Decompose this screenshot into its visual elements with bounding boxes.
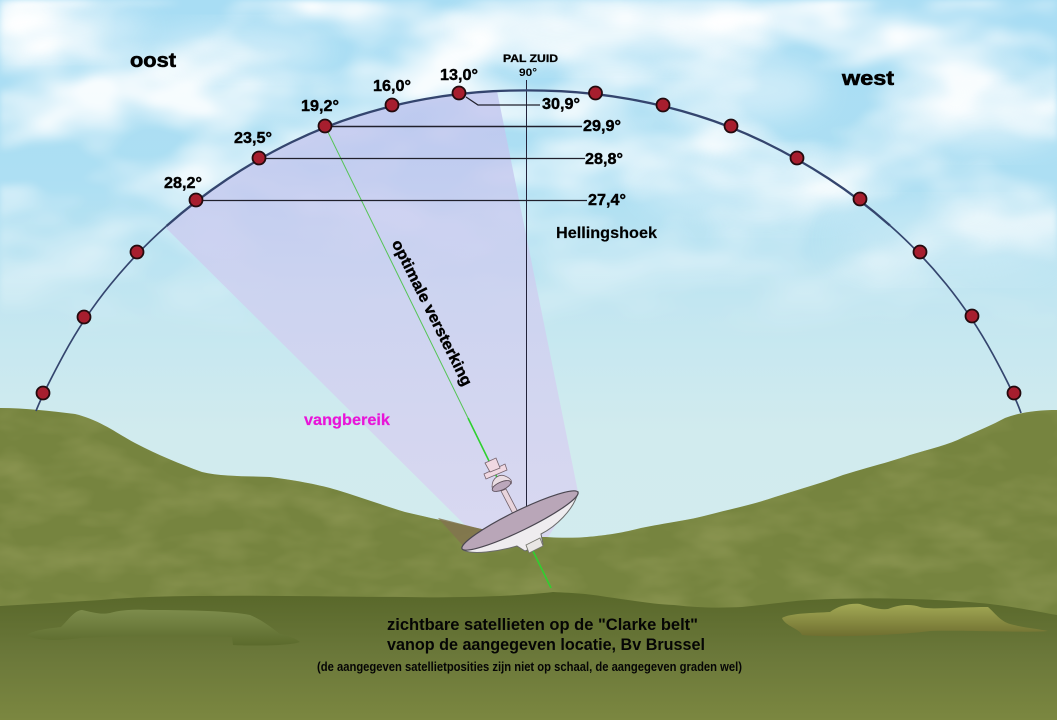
right ground patch bbox=[782, 604, 1048, 636]
azimuth labels: 19,2° bbox=[301, 98, 339, 115]
elevation labels bbox=[542, 96, 626, 209]
caption: vanop de aangegeven locatie, Bv Brussel bbox=[387, 635, 705, 654]
hills bbox=[0, 408, 1057, 615]
east label: oost bbox=[130, 50, 176, 72]
azimuth labels: 16,0° bbox=[373, 78, 411, 95]
azimuth labels bbox=[164, 67, 478, 192]
azimuth labels: 28,2° bbox=[164, 175, 202, 192]
dish bowl bbox=[462, 492, 578, 552]
brown beam shadow on hill bbox=[438, 518, 485, 548]
sky background bbox=[0, 0, 1057, 380]
elevation labels: 30,9° bbox=[542, 96, 580, 113]
icon: satellite dish bbox=[458, 458, 582, 558]
west label: west bbox=[841, 68, 894, 90]
capture range beam (vangbereik) bbox=[166, 91, 578, 540]
azimuth labels: 13,0° bbox=[440, 67, 478, 84]
dish stub bbox=[526, 538, 543, 553]
caption: (de aangegeven satellietposities zijn niet op schaal, de aangegeven graden wel) bbox=[317, 660, 742, 674]
azimuth labels: 23,5° bbox=[234, 130, 272, 147]
due south label: PAL ZUID bbox=[503, 53, 558, 65]
capture range label: vangbereik bbox=[304, 412, 390, 429]
caption bbox=[317, 615, 742, 674]
due south vertical line bbox=[526, 80, 528, 508]
elevation labels: 29,9° bbox=[583, 118, 621, 135]
dish rim bbox=[458, 483, 582, 558]
left ground patch bbox=[27, 610, 300, 646]
caption: zichtbare satellieten op de "Clarke belt" bbox=[387, 615, 698, 634]
foreground ground bbox=[0, 592, 1057, 720]
optimal gain label: optimale versterking bbox=[388, 237, 475, 389]
dish feed arm bbox=[501, 489, 518, 514]
feed dome bbox=[491, 475, 512, 494]
elevation labels: 27,4° bbox=[588, 192, 626, 209]
elevation labels: 28,8° bbox=[585, 151, 623, 168]
Clarke belt arc bbox=[36, 90, 1021, 413]
due south label bbox=[503, 53, 558, 79]
elevation leader lines bbox=[196, 97, 587, 200]
green optimal gain line bbox=[325, 126, 551, 588]
satellites on the arc bbox=[36, 86, 1020, 400]
elevation heading: Hellingshoek bbox=[556, 225, 657, 242]
due south label: 90° bbox=[519, 67, 537, 79]
feed plates bbox=[484, 458, 507, 479]
